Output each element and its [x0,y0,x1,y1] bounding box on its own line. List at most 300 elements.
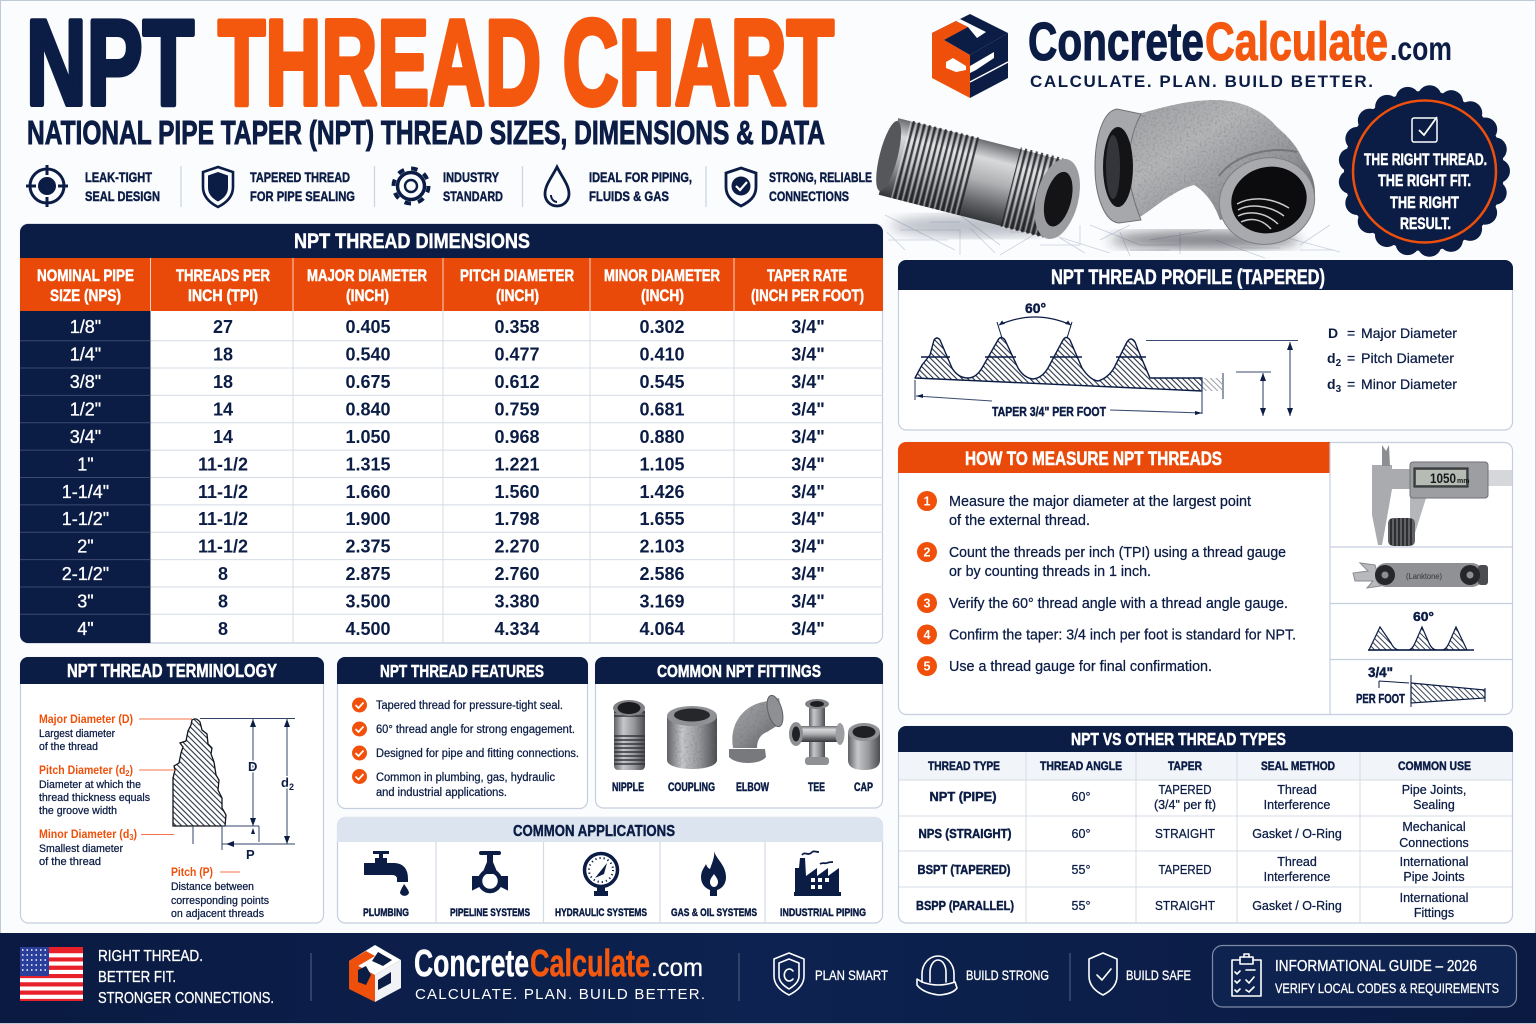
badge text [1364,150,1487,233]
feature item 2: 60° thread angle for strong engagement. [376,724,575,736]
row 3/8: 0.612 [494,372,540,392]
row: NPT: (3/4" per ft) [1154,798,1216,812]
taper label: TAPER 3/4" PER FOOT [992,404,1106,419]
diagram: taper per foot: 3/4" [1368,665,1393,680]
footer slogan [98,948,274,1007]
term: major diameter [39,714,133,753]
row 1: 1.315 [345,454,391,474]
row: BSPP: International [1400,891,1468,905]
diagram: thread cross-section: D [248,759,257,774]
row 3/4 [70,427,825,447]
legend: diameters [1327,325,1457,395]
table header: (INCH PER FOOT) [751,286,864,305]
row 2: 11-1/2 [198,536,248,556]
feature: ideal [589,169,692,204]
row 3/4: 1.050 [345,427,391,447]
table header: THREADS PER [176,266,270,285]
row 1-1/2 [62,509,825,529]
step 5: 5 [924,660,931,674]
row 3/4: 0.880 [639,427,685,447]
hero photo: nipple and elbow on blueprint [870,100,1340,258]
row 4: 8 [218,619,228,639]
row 1/8: 27 [213,317,233,337]
row: BSPP: BSPP (PARALLEL) [916,899,1014,913]
photo: caliper: mm [1457,478,1469,485]
profile header [898,260,1513,290]
feature: industry [443,169,503,204]
legend: diameters: = [1347,350,1355,366]
row: BSPT: Interference [1264,870,1330,884]
photo: thread gauge [1353,563,1488,588]
fittings header [595,657,883,684]
app: gas and oil systems [671,851,757,919]
term: pitch diameter: Pitch Diameter (d [39,765,134,777]
term: minor diameter: of the thread [39,856,101,868]
row 1/2: 3/4" [791,400,825,420]
row 3/4: 14 [213,427,233,447]
row 1/4: 18 [213,344,233,364]
photo: caliper [1372,445,1512,546]
subtitle: NATIONAL PIPE TAPER (NPT) THREAD SIZES, DIMENSIONS & DATA [27,114,825,151]
term: minor diameter: 3 [129,833,134,842]
row: BSPT: International [1400,855,1468,869]
step 1: Measure the major diameter at the largest point [949,494,1251,510]
row: NPS: Mechanical [1402,820,1466,834]
app: gas and oil systems: GAS & OIL SYSTEMS [671,907,757,919]
panel: thread profile [898,260,1513,430]
guide text: INFORMATIONAL GUIDE – 2026 [1275,958,1477,975]
feature: leak-tight: LEAK-TIGHT [85,169,152,185]
row 2-1/2 [62,564,825,584]
row 3/8: 18 [213,372,233,392]
term: major diameter: Largest diameter [39,728,115,740]
icon: US flag [20,947,83,1001]
measure header: HOW TO MEASURE NPT THREADS [965,449,1222,470]
row 1-1/2: 1.900 [345,509,391,529]
row 4: 4.334 [494,619,540,639]
step 1: of the external thread. [949,513,1090,529]
legend: diameters: D [1328,325,1338,341]
comparison header [898,726,1513,752]
row 1-1/2: 1-1/2" [62,509,109,529]
feature: tapered: FOR PIPE SEALING [250,188,355,204]
row: NPS: Connections [1399,836,1469,850]
row 1-1/2: 3/4" [791,509,825,529]
applications header [337,817,883,842]
feature item 4 [352,769,555,799]
row 2: 3/4" [791,536,825,556]
term: minor diameter: Minor Diameter (d [39,829,137,841]
panel: NPT thread dimensions table [20,224,883,643]
wordmark [1028,12,1452,72]
row 1: 1.221 [494,454,540,474]
row 1-1/4: 11-1/2 [198,482,248,502]
row 1/2: 0.759 [494,400,540,420]
footer wordmark: .com [651,954,703,982]
row 3: 3.500 [345,592,391,612]
feature: ideal: IDEAL FOR PIPING, [589,169,692,185]
step 2 [917,542,1286,580]
row 2: 2" [77,536,94,556]
app: plumbing [363,851,409,919]
dimension lines [915,340,1298,416]
app: pipeline systems: PIPELINE SYSTEMS [450,907,530,919]
row 1/4: 1/4" [70,344,101,364]
legend: diameters: Pitch Diameter [1361,350,1454,366]
legend: diameters: Minor Diameter [1361,376,1457,392]
legend: diameters: = [1347,376,1355,392]
app: hydraulic systems [555,854,647,919]
feature item 4: Common in plumbing, gas, hydraulic [376,772,555,784]
row 1/4: 0.410 [639,344,685,364]
row: NPT: 60° [1072,790,1090,804]
row: BSPT: TAPERED [1158,863,1212,877]
row 1-1/2: 1.798 [494,509,540,529]
row 2-1/2: 2.875 [345,564,391,584]
icon: footer cube [349,945,401,1002]
term: pitch: corresponding points [171,895,269,907]
fitting: cap [848,723,880,794]
row: NPS: Gasket / O-Ring [1252,827,1342,841]
row 1/4 [70,344,825,364]
table header: SIZE (NPS) [50,286,121,305]
row 2-1/2: 3/4" [791,564,825,584]
NPS column background [20,311,150,643]
row 1/2: 0.840 [345,400,391,420]
row 1: 1.105 [639,454,685,474]
feature item 1: Tapered thread for pressure-tight seal. [376,700,563,712]
badge text: THE RIGHT FIT. [1378,171,1471,190]
row 1 [77,454,825,474]
features header [337,657,588,684]
term: minor diameter: Smallest diameter [39,843,123,855]
feature: leak-tight: SEAL DESIGN [85,188,160,204]
row 3: 8 [218,592,228,612]
feature: leak-tight [85,169,160,204]
row: NPS [918,820,1469,850]
step 4: Confirm the taper: 3/4 inch per foot is standard for NPT. [949,628,1296,644]
row 1: 3/4" [791,454,825,474]
features header: NPT THREAD FEATURES [380,661,544,681]
feature: tapered: TAPERED THREAD [250,169,350,185]
legend: diameters: d [1327,376,1336,392]
row 3/4: 3/4" [70,427,101,447]
title [26,0,834,130]
row: BSPP [916,891,1468,920]
app: hydraulic systems: HYDRAULIC SYSTEMS [555,907,647,919]
dimension lines [193,718,295,850]
table title bar: NPT THREAD DIMENSIONS [294,230,530,253]
comparison header: NPT VS OTHER THREAD TYPES [1071,729,1286,749]
step 5: Use a thread gauge for final confirmation. [949,659,1212,675]
icon: shield [203,167,233,207]
app: pipeline systems [450,851,530,919]
row 1/8: 0.302 [639,317,685,337]
row: NPS: 60° [1072,827,1090,841]
logo: ConcreteCalculate header [932,12,1452,98]
row: NPS: NPS (STRAIGHT) [918,827,1012,841]
term: minor diameter: ) [133,829,137,841]
row 3/4: 0.968 [494,427,540,447]
guide text [1275,958,1499,996]
legend: diameters: Major Diameter [1361,325,1457,341]
panel: how to measure [898,442,1513,714]
term: pitch diameter [39,765,150,817]
icon: checkbox [1412,117,1437,142]
step 4: 4 [924,628,931,642]
terminology header: NPT THREAD TERMINOLOGY [67,661,277,681]
feature item 2 [352,722,575,736]
footer band [0,933,1536,1023]
applications header: COMMON APPLICATIONS [513,823,675,840]
app: plumbing: PLUMBING [363,907,409,919]
row: NPT: Pipe Joints, [1402,783,1466,797]
row 1-1/4: 1.660 [345,482,391,502]
row: NPT: Sealing [1413,798,1455,812]
feature: ideal: FLUIDS & GAS [589,188,669,204]
row 3/4: 3/4" [791,427,825,447]
row 1: 11-1/2 [198,454,248,474]
icon: cube logo [932,14,1008,98]
rows [916,783,1469,920]
row 2: 2.270 [494,536,540,556]
term: minor diameter [39,829,137,868]
feature: strong [769,169,872,204]
row 4: 4.064 [639,619,685,639]
legend: diameters: d [1327,350,1336,366]
table header: MINOR DIAMETER [604,266,720,285]
row: NPT: Interference [1264,798,1330,812]
blueprint background [885,215,1340,258]
column headers: COMMON USE [1398,759,1471,773]
row 3/8: 0.675 [345,372,391,392]
diagram: thread cross-section: 2 [289,782,294,792]
panel: thread features [337,657,588,808]
ground shadows [890,215,1060,237]
row 1-1/4: 1.560 [494,482,540,502]
row: NPS: STRAIGHT [1155,827,1215,841]
panel: common fittings [595,657,883,808]
icon: build strong helmet [917,956,957,995]
term: major diameter: of the thread [39,741,98,753]
term: pitch diameter: 2 [125,769,130,778]
panel: common applications [337,817,883,923]
fitting: cap: CAP [854,782,873,794]
row 3: 3/4" [791,592,825,612]
icon: plan smart shield [774,953,804,995]
diagram: taper per foot [1356,665,1485,707]
label: build strong: BUILD STRONG [966,967,1049,983]
row 1-1/2: 1.655 [639,509,685,529]
term: pitch diameter: thread thickness equals [39,792,150,804]
step 1 [917,491,1251,529]
tagline: CALCULATE. PLAN. BUILD BETTER. [1030,72,1373,91]
row 2: 2.375 [345,536,391,556]
icon: clipboard [1232,954,1261,996]
row 3: 3" [77,592,94,612]
callout: informational guide [1212,946,1516,1007]
step 2: Count the threads per inch (TPI) using a thread gauge [949,545,1286,561]
row 1-1/4: 1-1/4" [62,482,109,502]
row: BSPT: 55° [1072,863,1090,877]
diagram: thread cross-section: d [281,775,289,790]
icon: shield check [726,168,756,206]
diagram: thread cross-section [173,718,295,862]
fitting: nipple [612,700,645,794]
angle callout 60 degrees: 60° [1025,300,1046,316]
icon: target [26,165,68,207]
row 1/8: 0.405 [345,317,391,337]
profile header: NPT THREAD PROFILE (TAPERED) [1051,266,1325,289]
photo: caliper: 1050 [1430,470,1456,486]
term: pitch: Pitch (P) [171,867,213,879]
row 1/2: 1/2" [70,400,101,420]
feature: strong: CONNECTIONS [769,188,849,204]
row 1/4: 0.477 [494,344,540,364]
row: NPT [930,783,1466,812]
footer slogan: STRONGER CONNECTIONS. [98,990,274,1007]
diagram: mini 60 degree: 60° [1413,609,1434,624]
row 3/8: 3/8" [70,372,101,392]
footer wordmark: Concrete [414,943,529,985]
row: BSPT [918,855,1468,884]
fitting: nipple: NIPPLE [612,782,644,794]
wordmark: Concrete [1028,12,1204,72]
step 3: 3 [924,596,931,610]
row 2-1/2: 2-1/2" [62,564,109,584]
term: pitch diameter: ) [129,765,133,777]
app: industrial piping: INDUSTRIAL PIPING [780,907,866,919]
row 1-1/2: 11-1/2 [198,509,248,529]
table header: INCH (TPI) [188,286,258,305]
table header: MAJOR DIAMETER [307,266,427,285]
row 1-1/4: 3/4" [791,482,825,502]
row 4: 4" [77,619,94,639]
feature strip [26,165,872,207]
table title bar [20,224,883,258]
row: BSPP: Fittings [1414,906,1454,920]
row: BSPT: Thread [1277,855,1317,869]
row: BSPP: 55° [1072,899,1090,913]
term: pitch [171,867,269,920]
row 2: 2.103 [639,536,685,556]
row 3/8 [70,372,825,392]
footer slogan: RIGHT THREAD. [98,948,203,965]
panel: NPT vs other thread types [898,726,1513,923]
footer logo [349,943,705,1003]
label: build safe: BUILD SAFE [1126,967,1191,983]
feature: tapered [250,169,355,204]
row 2-1/2: 2.760 [494,564,540,584]
wordmark: Calculate [1205,12,1388,72]
footer wordmark [414,943,703,985]
footer slogan: BETTER FIT. [98,969,176,986]
table header [20,258,883,311]
row 1/8 [70,317,825,337]
column headers: THREAD TYPE [928,759,1000,773]
step 3: Verify the 60° thread angle with a thread angle gauge. [949,596,1288,612]
badge: right thread [1344,91,1504,251]
row 2 [77,536,825,556]
column headers: TAPER [1168,759,1202,773]
table header: (INCH) [346,286,389,305]
row 1/8: 1/8" [70,317,101,337]
column headers: SEAL METHOD [1261,759,1335,773]
feature item 3 [352,746,579,760]
icon: build safe shield [1089,953,1117,995]
row 1: 1" [77,454,94,474]
term: pitch: on adjacent threads [171,908,264,920]
term: pitch diameter: Diameter at which the [39,779,141,791]
feature item 1 [352,698,563,712]
row: NPT: NPT (PIPE) [930,790,996,804]
row 3: 3.380 [494,592,540,612]
column headers: THREAD ANGLE [1040,759,1122,773]
wordmark: .com [1390,30,1452,67]
legend: diameters: 2 [1336,358,1342,369]
footer wordmark: Calculate [530,943,650,985]
feature: industry: INDUSTRY [443,169,500,185]
row: BSPP: STRAIGHT [1155,899,1215,913]
row 1-1/4: 1.426 [639,482,685,502]
row: BSPT: Pipe Joints [1403,870,1465,884]
row 1/2: 14 [213,400,233,420]
icon: gear [394,168,428,204]
term: pitch diameter: the groove width [39,805,117,817]
angle callout 60 degrees [997,300,1072,338]
legend: diameters: = [1347,325,1355,341]
column headers [899,752,1512,780]
app: industrial piping [780,851,866,919]
row 2-1/2: 2.586 [639,564,685,584]
step 2: or by counting threads in 1 inch. [949,564,1151,580]
fitting: elbow [729,694,786,794]
table header: TAPER RATE [767,266,847,285]
row 1/8: 3/4" [791,317,825,337]
row: NPT: Thread [1277,783,1317,797]
row 4 [77,619,825,639]
step 2: 2 [924,546,931,560]
photo: elbow fitting [1095,100,1324,255]
row: NPT: TAPERED [1158,783,1212,797]
feature item 4: and industrial applications. [376,787,507,799]
step 1: 1 [924,494,931,508]
feature: industry: STANDARD [443,188,503,204]
term: major diameter: Major Diameter (D) [39,714,133,726]
row 1/2 [70,400,825,420]
row 4: 3/4" [791,619,825,639]
row 1-1/4 [62,482,825,502]
photo: thread gauge: (Lanktone) [1406,572,1442,581]
photo: threaded nipple [870,114,1088,244]
icon: drop [545,167,569,206]
row 3/8: 3/4" [791,372,825,392]
badge text: RESULT. [1400,214,1451,233]
row 3: 3.169 [639,592,685,612]
badge text: THE RIGHT [1390,193,1459,212]
row 3 [77,592,825,612]
fitting: tee: TEE [808,782,825,794]
fitting: coupling [667,706,717,794]
row 3/8: 0.545 [639,372,685,392]
row 1/4: 0.540 [345,344,391,364]
table header: (INCH) [641,286,684,305]
row 4: 4.500 [345,619,391,639]
table header: (INCH) [496,286,539,305]
fitting: tee [789,699,844,794]
legend: diameters: 3 [1336,384,1342,395]
row 1/2: 0.681 [639,400,685,420]
